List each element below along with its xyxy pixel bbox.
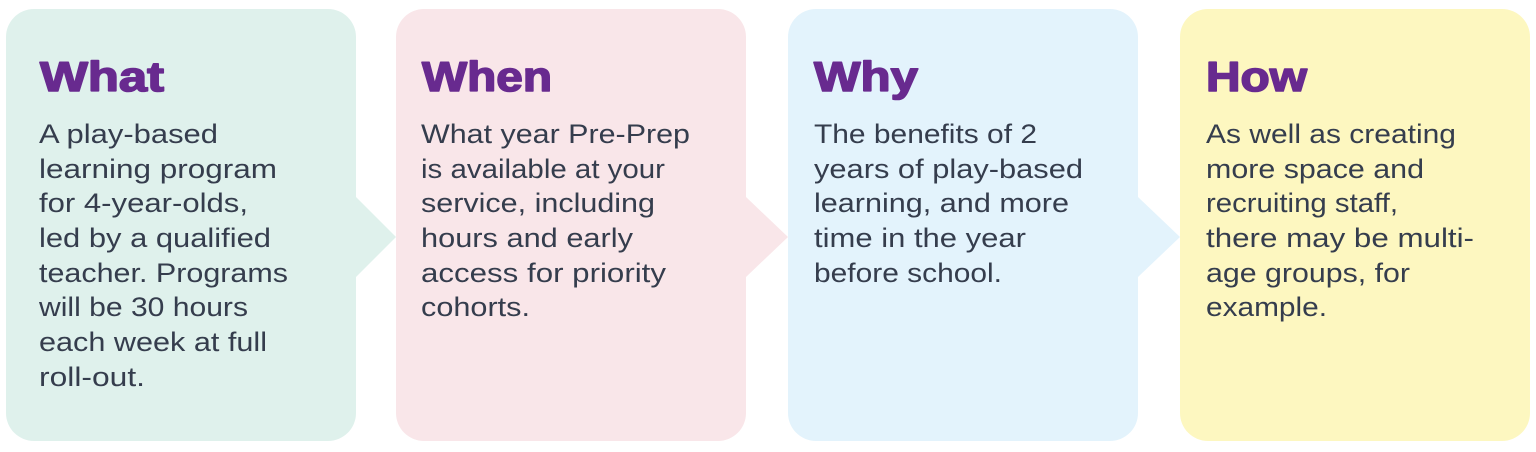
text block: what: each week at full — [39, 327, 267, 357]
text block: how: example. — [1206, 292, 1327, 322]
text block: how: there may be multi- — [1206, 223, 1474, 253]
text block: what: roll-out. — [39, 362, 145, 392]
text block: what: teacher. Programs — [39, 258, 288, 288]
text block: what: for 4-year-olds, — [39, 188, 248, 218]
text block: when: What year Pre-Prep — [421, 119, 690, 149]
text block: what: A play-based — [39, 119, 218, 149]
panel shape: when with arrow — [396, 9, 788, 441]
text block: why: before school. — [814, 258, 1002, 288]
text block: how: more space and — [1206, 154, 1424, 184]
heading: what: What — [40, 53, 164, 100]
heading: when: When — [422, 53, 552, 100]
text block: why: learning, and more — [814, 188, 1069, 218]
text block: why: time in the year — [814, 223, 1026, 253]
text block: how: recruiting staff, — [1206, 188, 1398, 218]
text block: why: The benefits of 2 — [814, 119, 1037, 149]
panel: when — [396, 9, 788, 441]
text block: how: As well as creating — [1206, 119, 1456, 149]
text block: how — [1206, 119, 1474, 322]
text block: what: led by a qualified — [39, 223, 271, 253]
panel: how — [1180, 9, 1530, 441]
text block: when: access for priority — [421, 258, 667, 288]
panel shape: why with arrow — [788, 9, 1180, 441]
text block: what: learning program — [39, 154, 277, 184]
text block: when: cohorts. — [421, 292, 530, 322]
panel shape: how — [1180, 9, 1530, 441]
text block: what: will be 30 hours — [38, 292, 248, 322]
panel: what — [6, 9, 396, 441]
text block: how: age groups, for — [1206, 258, 1410, 288]
panel: why — [788, 9, 1180, 441]
heading: why: Why — [814, 53, 919, 100]
text block: when: is available at your — [421, 154, 665, 184]
text block: why: years of play-based — [814, 154, 1083, 184]
text block: when: hours and early — [421, 223, 634, 253]
text block: why — [814, 119, 1083, 288]
text block: when: service, including — [421, 188, 655, 218]
text block: when — [421, 119, 690, 322]
heading: how: How — [1206, 53, 1307, 100]
text block: what — [38, 119, 288, 392]
panel shape: what with arrow — [6, 9, 396, 441]
